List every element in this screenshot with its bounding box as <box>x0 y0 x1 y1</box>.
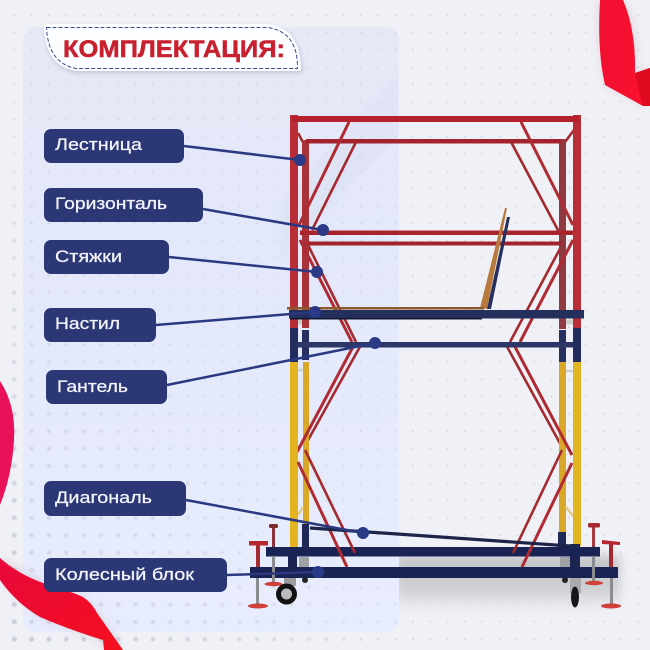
post cross pieces <box>298 322 573 516</box>
lower diagonals <box>298 450 572 567</box>
callout: Лестница <box>44 129 306 166</box>
callout: Горизонталь: Горизонталь <box>55 195 167 213</box>
inner posts <box>302 139 566 550</box>
callout: Стяжки <box>44 240 323 278</box>
inner rails <box>306 139 562 246</box>
ribbon: left <box>0 381 14 505</box>
ribbon: top right <box>598 0 650 106</box>
top rail <box>292 116 579 122</box>
upper back diagonals <box>298 130 574 447</box>
title badge <box>44 24 302 73</box>
gantel bar <box>297 342 573 348</box>
callout: Стяжки: Стяжки <box>55 248 122 266</box>
callout: Гантель: Гантель <box>57 378 128 396</box>
deck board <box>287 208 584 320</box>
floor shadow <box>395 556 620 618</box>
base front rail <box>250 567 618 578</box>
callout: Диагональ: Диагональ <box>55 489 152 507</box>
title: КОМПЛЕКТАЦИЯ: <box>63 36 285 63</box>
base back rail <box>266 547 600 556</box>
scaffold tower <box>248 115 621 608</box>
callout: Настил <box>44 306 321 342</box>
wheels <box>276 557 581 608</box>
ribbon: bottom left <box>0 558 123 650</box>
panel: components <box>23 27 399 632</box>
jacks <box>248 523 621 608</box>
callout: Лестница: Лестница <box>55 136 143 154</box>
callout: Настил: Настил <box>55 315 120 333</box>
callout: Колесный блок: Колесный блок <box>55 566 195 584</box>
callout: Диагональ <box>44 481 369 539</box>
callout: Колесный блок <box>44 558 324 592</box>
base diagonal <box>310 528 570 546</box>
outer posts <box>288 115 581 578</box>
callout: Гантель <box>46 337 381 404</box>
callout: Горизонталь <box>44 188 329 236</box>
outer diagonals <box>297 122 573 455</box>
mid rail <box>300 230 573 235</box>
